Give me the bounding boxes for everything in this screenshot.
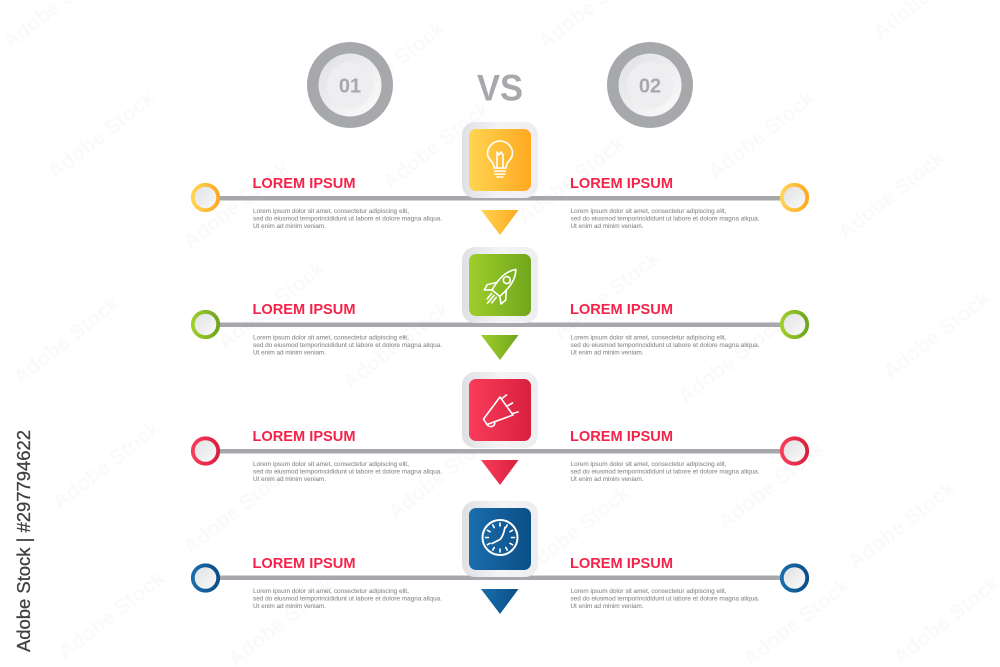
row 3 right node — [782, 438, 807, 464]
watermark pattern: Adobe Stock — [549, 247, 664, 344]
side stock credit: Adobe Stock | #297794622 — [13, 430, 34, 652]
row 3 right text: sed do eiusmod temporincididunt ut labore et dolore magna aliqua. — [570, 468, 760, 476]
badge 02: 02 — [639, 76, 661, 98]
watermark pattern: Adobe Stock — [844, 477, 959, 574]
row 1 icon tile — [469, 129, 531, 191]
row 3 left node — [193, 438, 218, 464]
row 2 left node — [193, 312, 218, 337]
row 1 left text: sed do eiusmod temporincididunt ut labore et dolore magna aliqua. — [253, 216, 442, 222]
row 1 right text: Lorem ipsum dolor sit amet, consectetur adipiscing elit, — [570, 208, 727, 215]
row 3 left text: Lorem ipsum dolor sit amet, consectetur adipiscing elit, — [253, 461, 409, 468]
watermark pattern: Adobe Stock — [834, 147, 949, 244]
icon: light bulb — [488, 141, 512, 177]
row 3 icon tile — [469, 379, 531, 441]
row 1 tile — [462, 122, 538, 198]
row 1 right text: Ut enim ad minim veniam. — [570, 223, 644, 230]
watermark pattern: Adobe Stock — [54, 567, 169, 664]
row 4 left node — [193, 565, 218, 591]
watermark pattern: Adobe Stock — [514, 132, 629, 229]
row 2: launch — [193, 247, 807, 360]
row 4 right heading: LOREM IPSUM — [570, 555, 673, 572]
row 2 connector line — [205, 322, 795, 327]
watermark pattern: Adobe Stock — [519, 482, 634, 579]
VS label: VS — [477, 68, 523, 108]
row 1 right text — [570, 208, 760, 230]
row 1 right text: sed do eiusmod temporincididunt ut labore et dolore magna aliqua. — [570, 216, 760, 222]
row 3 left text: Ut enim ad minim veniam. — [253, 476, 326, 483]
badge 01 — [307, 42, 393, 128]
row 4 connector line — [205, 576, 795, 580]
row 1 left heading: LOREM IPSUM — [252, 175, 356, 192]
row 2 left text: Ut enim ad minim veniam. — [253, 350, 326, 356]
watermark pattern: Adobe Stock — [334, 17, 449, 114]
row 2 tile — [462, 247, 538, 323]
row 4 left text — [253, 588, 442, 610]
row 2 left text: Lorem ipsum dolor sit amet, consectetur adipiscing elit, — [253, 334, 409, 342]
row 3 arrow — [481, 460, 518, 485]
row 1 left node — [193, 185, 218, 210]
row 2 left text — [253, 334, 442, 356]
row 3 tile — [462, 372, 538, 448]
icon: rocket — [478, 262, 525, 311]
row 3 right text: Lorem ipsum dolor sit amet, consectetur adipiscing elit, — [570, 461, 727, 468]
badge 01: 01 — [339, 76, 361, 98]
row 3 right heading: LOREM IPSUM — [570, 428, 673, 445]
row 4 arrow — [481, 589, 518, 614]
watermark pattern: Adobe Stock — [674, 312, 789, 409]
row 4 left heading: LOREM IPSUM — [252, 555, 356, 572]
row 2 right node — [782, 312, 807, 337]
row 4: time — [193, 501, 807, 614]
row 3 left heading: LOREM IPSUM — [252, 428, 356, 445]
row 2 right text: Ut enim ad minim veniam. — [570, 350, 644, 356]
row 2 left text: sed do eiusmod temporincididunt ut labore et dolore magna aliqua. — [253, 342, 442, 349]
badge 02 — [607, 42, 693, 128]
row 4 right text: Ut enim ad minim veniam. — [570, 603, 644, 610]
row 2 right heading: LOREM IPSUM — [570, 301, 673, 318]
watermark pattern: Adobe Stock — [879, 287, 994, 384]
row 1 connector line — [205, 196, 795, 200]
watermark pattern: Adobe Stock — [704, 87, 819, 184]
row 2 right text: sed do eiusmod temporincididunt ut labore et dolore magna aliqua. — [570, 342, 760, 349]
row 4 left text: Ut enim ad minim veniam. — [253, 603, 326, 610]
icon: megaphone — [484, 395, 518, 427]
row 4 icon tile — [469, 508, 531, 570]
row 3: announce — [193, 372, 807, 485]
row 1 left text: Lorem ipsum dolor sit amet, consectetur adipiscing elit, — [253, 208, 409, 215]
watermark pattern: Adobe Stock — [339, 297, 454, 394]
row 2 arrow — [481, 335, 518, 360]
watermark pattern: Adobe Stock — [179, 462, 294, 559]
row 3 connector line — [205, 449, 795, 454]
row 4 right text: Lorem ipsum dolor sit amet, consectetur adipiscing elit, — [570, 588, 727, 595]
watermark pattern: Adobe Stock — [714, 437, 829, 534]
row 4 right text: sed do eiusmod temporincididunt ut labore et dolore magna aliqua. — [570, 596, 760, 602]
row 4 left text: Lorem ipsum dolor sit amet, consectetur adipiscing elit, — [253, 588, 409, 595]
row 1 left text: Ut enim ad minim veniam. — [253, 223, 326, 230]
watermark pattern: Adobe Stock — [379, 97, 494, 194]
watermark pattern: Adobe Stock — [179, 157, 294, 254]
row 4 right node — [782, 565, 807, 591]
row 2 right text: Lorem ipsum dolor sit amet, consectetur adipiscing elit, — [570, 334, 727, 342]
row 1 right heading: LOREM IPSUM — [570, 175, 673, 192]
row 3 right text: Ut enim ad minim veniam. — [570, 476, 644, 483]
row 1 right node — [782, 185, 807, 210]
row 2 icon tile — [469, 254, 531, 316]
watermark pattern: Adobe Stock — [384, 427, 499, 524]
row 3 right text — [570, 461, 760, 483]
icon: clock — [482, 520, 518, 555]
row 2 left heading: LOREM IPSUM — [252, 301, 356, 318]
row 1: idea — [193, 122, 807, 235]
row 4 left text: sed do eiusmod temporincididunt ut labore et dolore magna aliqua. — [253, 596, 442, 602]
row 1 left text — [253, 208, 442, 230]
row 3 left text — [253, 461, 442, 483]
row 4 tile — [462, 501, 538, 577]
watermark pattern: Adobe Stock — [49, 417, 164, 514]
watermark pattern: Adobe Stock — [214, 257, 329, 354]
row 1 arrow — [481, 210, 518, 235]
watermark pattern: Adobe Stock — [44, 87, 159, 184]
watermark pattern: Adobe Stock — [9, 292, 124, 389]
row 4 right text — [570, 588, 760, 610]
row 3 left text: sed do eiusmod temporincididunt ut labore et dolore magna aliqua. — [253, 468, 442, 476]
row 2 right text — [570, 334, 760, 356]
